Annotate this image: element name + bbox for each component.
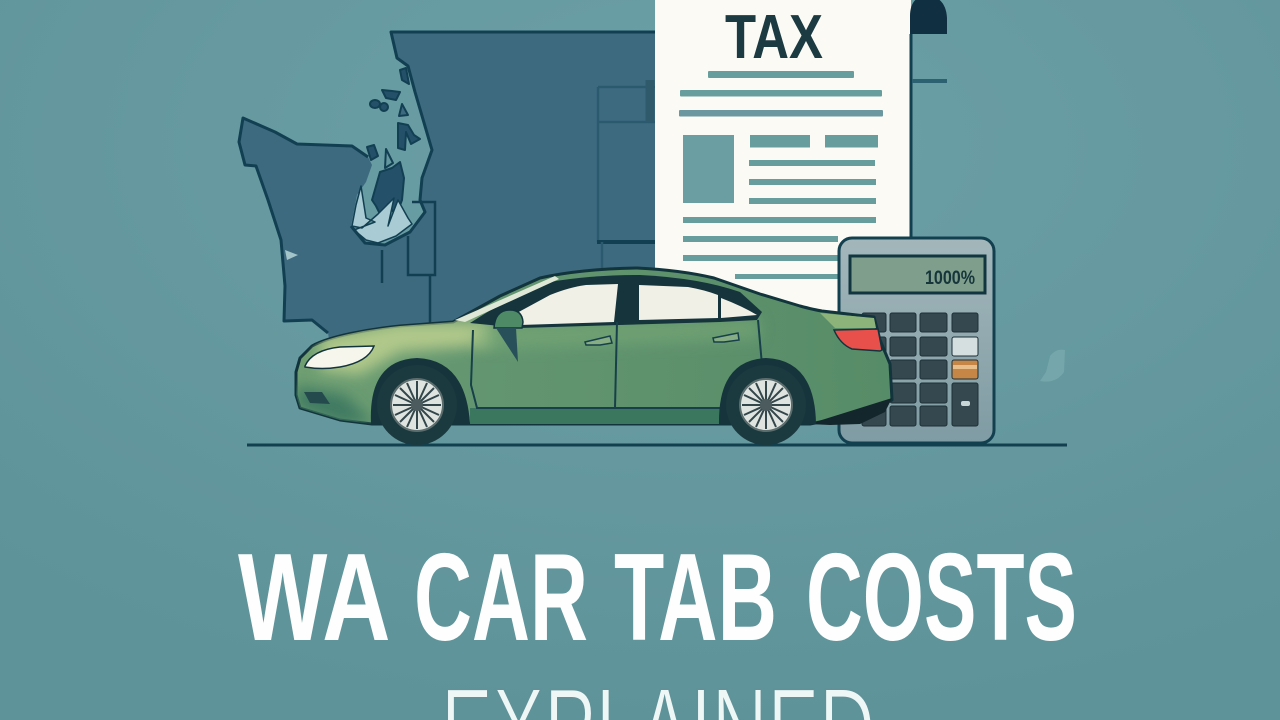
display reading: 1000% xyxy=(925,268,975,289)
door seams xyxy=(471,320,762,408)
document text lines xyxy=(679,71,883,279)
tax document xyxy=(655,0,947,316)
ground line xyxy=(247,444,1067,446)
map: coast notch xyxy=(285,250,298,260)
smudge beside calculator xyxy=(1040,350,1065,382)
trunk top highlight xyxy=(820,313,876,328)
title: TAB xyxy=(614,529,777,667)
document sheet xyxy=(655,0,911,316)
rear door handle xyxy=(713,333,739,342)
document right edge xyxy=(910,34,912,240)
map: sound inlets and islands xyxy=(367,68,420,218)
sill shade xyxy=(470,408,720,424)
title: COSTS xyxy=(806,529,1077,667)
tall key mark xyxy=(961,401,970,406)
title: CAR xyxy=(414,529,588,667)
mirror shadow xyxy=(496,328,518,362)
state map of Washington xyxy=(239,32,656,345)
calculator body xyxy=(839,238,994,443)
fog lamp xyxy=(304,392,330,404)
front window xyxy=(515,284,618,325)
rear quarter window xyxy=(721,298,757,318)
infographic canvas xyxy=(238,0,1074,720)
map: county boundary lines xyxy=(382,80,655,325)
tail light xyxy=(834,329,882,351)
margin dash xyxy=(912,79,947,83)
rear wheel xyxy=(719,358,816,445)
rear window xyxy=(639,285,718,320)
map: land silhouette xyxy=(239,32,656,345)
orange key highlight xyxy=(953,365,977,369)
door handles xyxy=(585,336,612,345)
scroll roll xyxy=(910,0,947,34)
door top light band xyxy=(474,320,758,347)
lower front shade xyxy=(296,385,374,424)
body shading xyxy=(296,318,760,426)
calculator xyxy=(839,238,994,443)
windshield pillar highlight xyxy=(455,276,559,322)
map: lower sound channels xyxy=(352,186,412,243)
hood highlight xyxy=(320,322,490,375)
car body xyxy=(296,268,892,424)
front wheel xyxy=(371,358,470,445)
calculator display xyxy=(850,256,985,293)
headlight xyxy=(305,346,374,368)
roof dark window frame xyxy=(470,275,762,328)
rear bumper shadow xyxy=(809,398,892,425)
calculator keys xyxy=(862,313,978,426)
side mirror xyxy=(494,310,523,328)
map: coastline outline xyxy=(239,32,656,333)
document heading: TAX xyxy=(725,3,823,72)
title: WA xyxy=(238,529,389,667)
green sedan car xyxy=(296,268,892,445)
